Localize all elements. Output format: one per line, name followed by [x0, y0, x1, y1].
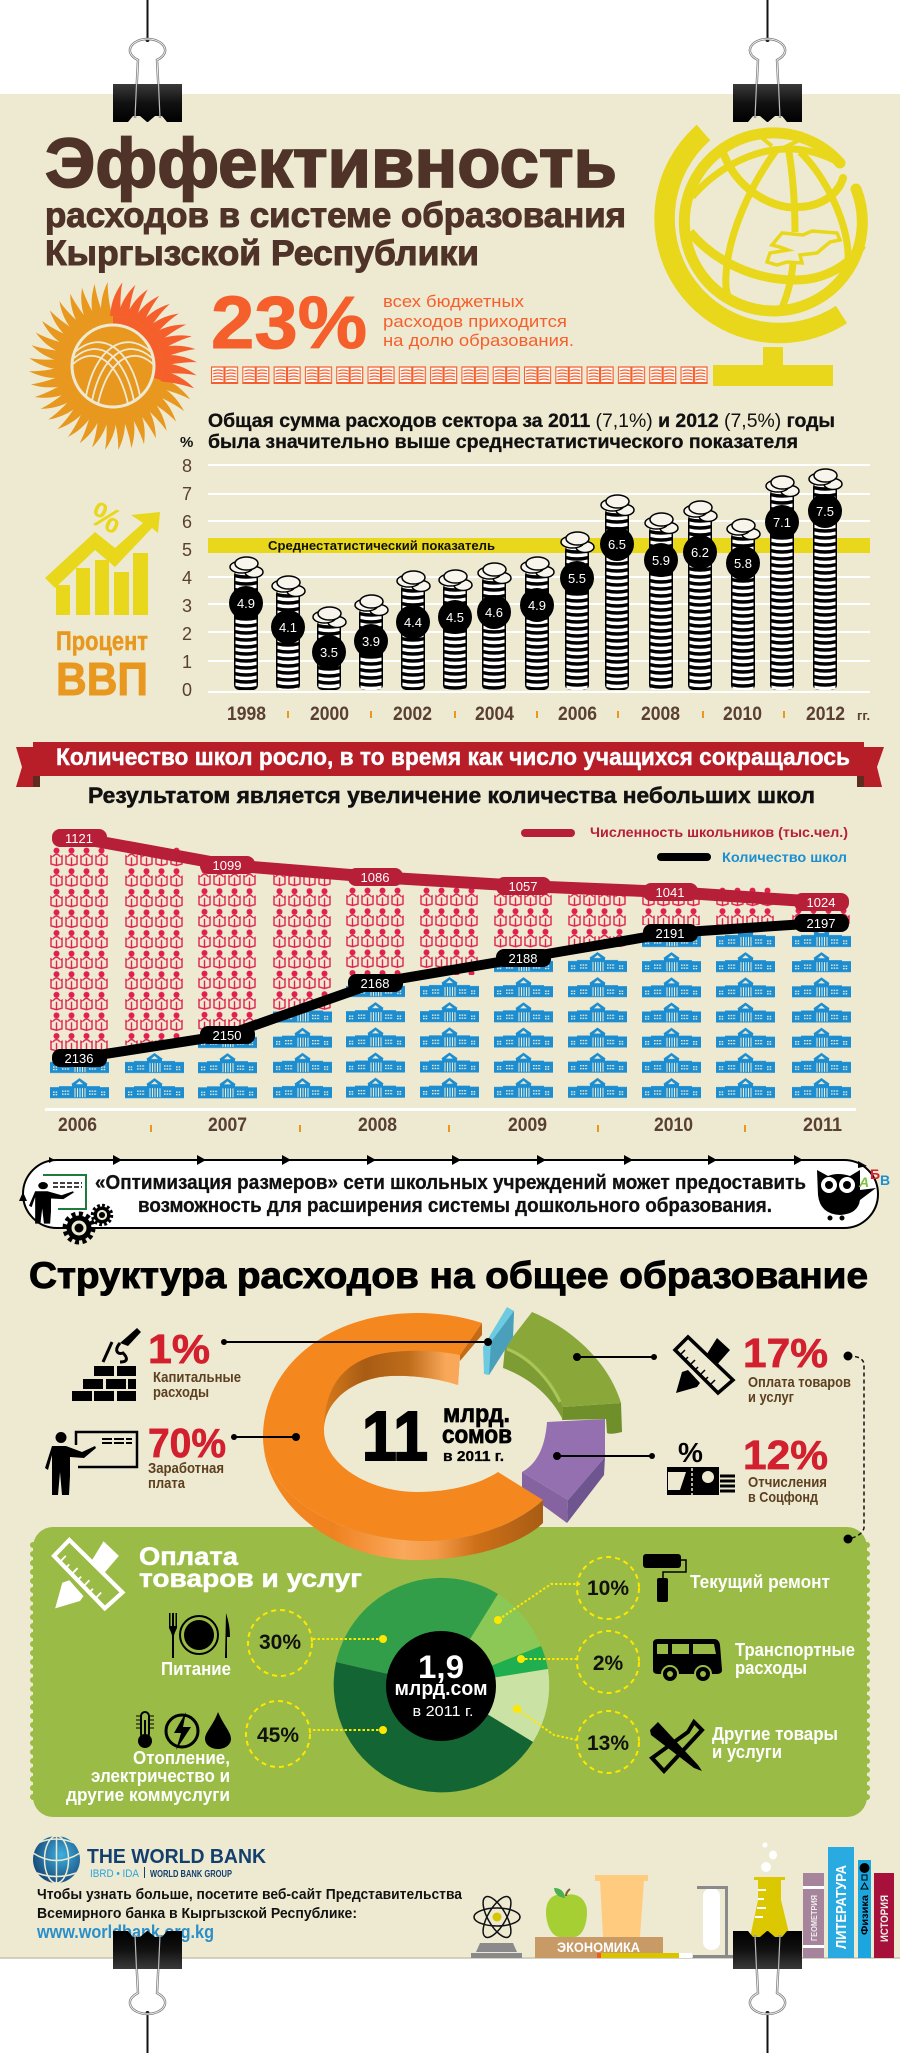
stat: 23 percent: всех бюджетных	[383, 292, 525, 311]
y axis labels: 6	[182, 512, 192, 532]
chart: GDP share bars	[182, 456, 870, 725]
icon: trowel and bricks	[72, 1328, 141, 1401]
stat: goods 17 percent: Оплата товаров	[748, 1374, 851, 1391]
center label	[362, 1397, 512, 1475]
value badges	[229, 494, 842, 669]
x axis years: 2010	[723, 704, 762, 725]
stat: 23 percent: расходов приходится	[383, 312, 567, 331]
value labels: 5.9	[652, 553, 670, 568]
time axis: 2008	[358, 1115, 397, 1136]
stat: salaries 70 percent: плата	[148, 1475, 186, 1492]
category labels: электричество и	[91, 1766, 230, 1786]
center label: млрд.	[443, 1400, 510, 1428]
value labels: 5.8	[734, 556, 752, 571]
y axis labels: 2	[182, 624, 192, 644]
average band	[208, 538, 870, 553]
category labels	[66, 1572, 855, 1805]
callout: optimization pill: возможность для расширения системы дошкольного образования.	[138, 1195, 772, 1217]
value labels: 4.9	[237, 596, 255, 611]
panel: goods and services	[33, 1527, 867, 1817]
percentages	[257, 1577, 629, 1755]
x axis years: 2004	[475, 704, 514, 725]
footer text	[36, 1887, 463, 1942]
value labels: 4.6	[485, 605, 503, 620]
icon: cup	[595, 1875, 648, 1937]
student value badges: 1121	[65, 831, 93, 846]
panel title	[139, 1543, 362, 1593]
section heading: Структура расходов на общее образование	[29, 1255, 868, 1296]
category labels: и услуги	[712, 1742, 782, 1762]
school pictograms	[50, 927, 852, 1100]
x axis years: 2008	[641, 704, 680, 725]
student value badges: 1057	[509, 879, 537, 894]
icon: plate and cutlery	[169, 1613, 230, 1658]
icon: owl with letters: А	[858, 1174, 869, 1190]
line: students	[79, 838, 821, 902]
purple slice	[522, 1419, 605, 1523]
time axis	[45, 1108, 856, 1136]
school value badges: 2168	[361, 976, 389, 991]
stat: capital 1 percent: Капитальные	[153, 1369, 241, 1386]
globe logo	[33, 1836, 80, 1883]
value labels: 4.1	[279, 620, 297, 635]
x axis years: 2002	[393, 704, 432, 725]
y axis labels	[182, 456, 192, 700]
stat: social fund 12 percent: 12%	[743, 1432, 828, 1478]
time axis: 2006	[58, 1115, 97, 1136]
stat: 23 percent: 23%	[211, 281, 367, 364]
y axis labels: 0	[182, 680, 192, 700]
stat: capital 1 percent: расходы	[153, 1384, 209, 1401]
icon: rising arrow with bars	[45, 495, 160, 615]
orange slice end edge	[460, 1323, 482, 1361]
callout: optimization pill	[19, 1155, 890, 1242]
category labels: Другие товары	[712, 1724, 838, 1744]
stat: social fund 12 percent: в Соцфонд	[748, 1489, 818, 1506]
student value badges	[52, 829, 849, 911]
y axis labels: 7	[182, 484, 192, 504]
books upright	[803, 1847, 894, 1958]
time axis: 2007	[208, 1115, 247, 1136]
chart heading: Общая сумма расходов сектора за 2011 (7,1%) и 2012 (7,5%) годы	[208, 411, 835, 432]
student value badges: 1099	[213, 858, 241, 873]
logo: The World Bank: WORLD BANK GROUP	[150, 1869, 232, 1880]
percentages: 30%	[259, 1631, 301, 1654]
binder clip: top right	[733, 0, 802, 122]
orange rim	[263, 1437, 543, 1560]
center label: сомов	[442, 1421, 512, 1449]
binder clip: bottom left	[113, 1931, 182, 2053]
category labels: Текущий ремонт	[690, 1572, 830, 1592]
label: percent of GDP: Процент	[56, 626, 148, 656]
legend: Численность школьников (тыс.чел.)	[590, 824, 848, 840]
stat: social fund 12 percent: Отчисления	[748, 1474, 827, 1491]
value labels: 4.9	[528, 598, 546, 613]
school value badges: 2188	[509, 951, 537, 966]
chart: students and schools	[45, 824, 856, 1136]
icon: paint roller	[643, 1554, 686, 1602]
stat: social fund 12 percent	[743, 1432, 828, 1506]
green slice	[503, 1312, 622, 1434]
label: percent of GDP	[56, 626, 148, 705]
orange slice	[263, 1313, 543, 1541]
value labels: 7.1	[773, 515, 791, 530]
y axis labels: 5	[182, 540, 192, 560]
category labels: Транспортные	[735, 1640, 855, 1660]
student value badges: 1024	[807, 895, 835, 910]
logo: The World Bank: THE WORLD BANK	[87, 1846, 267, 1868]
icon: pencil	[597, 1953, 692, 1958]
value labels: 4.5	[446, 610, 464, 625]
percentages: 13%	[587, 1732, 629, 1755]
icon: thermometer, bolt, drop	[136, 1712, 231, 1750]
icon: atom	[471, 1893, 522, 1958]
school value badges: 2197	[807, 916, 835, 931]
icon: teacher at blackboard	[45, 1432, 137, 1495]
x axis years: 2000	[310, 704, 349, 725]
leader lines	[221, 1338, 657, 1460]
value labels: 3.9	[362, 634, 380, 649]
icon: owl with letters	[817, 1166, 890, 1220]
logo: The World Bank	[33, 1836, 267, 1883]
icon: test tube	[693, 1886, 735, 1958]
value labels: 6.2	[691, 545, 709, 560]
icon: pencil and ruler black	[650, 1722, 702, 1771]
title	[45, 124, 626, 273]
donut chart	[263, 1307, 622, 1560]
cyan slice	[483, 1307, 514, 1375]
average band: Среднестатистический показатель	[268, 538, 495, 553]
school value badges: 2191	[656, 926, 684, 941]
percentages: 10%	[587, 1577, 629, 1600]
value labels: 6.5	[608, 537, 626, 552]
school value badges: 2150	[213, 1028, 241, 1043]
title: Кыргызской Республики	[45, 234, 479, 273]
x axis years: 2006	[558, 704, 597, 725]
stat: 23 percent	[211, 281, 574, 364]
x axis years: 1998	[227, 704, 266, 725]
student pictograms	[50, 847, 852, 1053]
coin stacks	[234, 482, 837, 690]
category labels: расходы	[735, 1658, 807, 1678]
value labels	[237, 504, 834, 660]
icon: Kyrgyz sun tunduk	[29, 282, 197, 450]
label: percent of GDP: ВВП	[56, 653, 148, 705]
icon: teacher with gears	[29, 1175, 112, 1242]
shelf illustration	[471, 1842, 894, 1958]
books upright: ЛИТЕРАТУРА	[833, 1865, 850, 1949]
stat: capital 1 percent	[148, 1326, 241, 1401]
title: Эффективность	[45, 124, 617, 202]
icon: percent and banknote: %	[678, 1437, 703, 1468]
icon: percent and banknote	[667, 1437, 735, 1495]
center label: в 2011 г.	[443, 1448, 504, 1465]
category labels: Отопление,	[133, 1748, 230, 1768]
chart heading: была значительно выше среднестатистического показателя	[208, 432, 798, 453]
category labels: Питание	[161, 1659, 231, 1679]
value labels: 4.4	[404, 615, 422, 630]
student value badges: 1041	[656, 885, 684, 900]
time axis: 2010	[654, 1115, 693, 1136]
y axis labels: 1	[182, 652, 192, 672]
stat: goods 17 percent: 17%	[743, 1330, 828, 1376]
icon: yellow globe on stand	[665, 132, 862, 386]
callouts dashed circles and leader lines	[246, 1557, 639, 1773]
orange inner wall	[324, 1351, 460, 1430]
student value badges: 1086	[361, 870, 389, 885]
leader dots	[379, 1616, 525, 1734]
icon: owl with letters: В	[880, 1172, 890, 1188]
y axis labels: 4	[182, 568, 192, 588]
pie chart: в 2011 г.	[412, 1703, 474, 1720]
time axis: 2011	[803, 1115, 842, 1136]
icon: owl with letters: Б	[870, 1166, 880, 1182]
footer text: www.worldbank.org.kg	[36, 1922, 214, 1942]
category labels: другие коммуслуги	[66, 1785, 230, 1805]
x axis years: 2012	[806, 704, 845, 725]
books upright: ГЕОМЕТРИЯ	[809, 1895, 819, 1941]
title: расходов в системе образования	[45, 196, 626, 235]
dashed connector	[844, 1352, 864, 1544]
icon: ruler and pencil white	[54, 1540, 122, 1608]
icon: bus	[653, 1639, 722, 1682]
books upright: Физика	[859, 1895, 871, 1935]
line: schools	[79, 923, 821, 1058]
panel title: товаров и услуг	[139, 1565, 362, 1593]
banner	[16, 742, 884, 787]
school value badges	[52, 914, 849, 1067]
subheading: Результатом является увеличение количества небольших школ	[88, 783, 815, 808]
coin tops	[230, 469, 842, 628]
stat: capital 1 percent: 1%	[148, 1326, 210, 1372]
footer text: Всемирного банка в Кыргызской Республике:	[37, 1906, 357, 1922]
center label: 11	[362, 1397, 428, 1475]
stat: salaries 70 percent: Заработная	[148, 1460, 224, 1477]
book: economics	[535, 1937, 663, 1958]
callout: optimization pill: «Оптимизация размеров» сети школьных учреждений может предоставить	[95, 1172, 806, 1194]
stat: salaries 70 percent: 70%	[148, 1420, 226, 1466]
pie chart: млрд.сом	[394, 1678, 488, 1700]
x axis years	[227, 704, 870, 725]
binder clip: bottom right	[733, 1931, 802, 2053]
icon: flask with bubbles	[751, 1842, 789, 1958]
stat: 23 percent: на долю образования.	[383, 331, 574, 350]
footer text: Чтобы узнать больше, посетите веб-сайт Представительства	[37, 1887, 463, 1903]
icon: rising arrow with bars: %	[84, 495, 128, 542]
icon: apple	[546, 1888, 587, 1937]
legend	[521, 824, 848, 865]
pie chart: 1,9	[418, 1649, 464, 1685]
school value badges: 2136	[65, 1051, 93, 1066]
x axis years: гг.	[857, 708, 870, 723]
value labels: 5.5	[568, 571, 586, 586]
legend: Количество школ	[722, 849, 847, 865]
icon row: books	[211, 366, 709, 384]
logo: The World Bank: IBRD • IDA	[90, 1868, 140, 1880]
percentages: 45%	[257, 1724, 299, 1747]
value labels: 7.5	[816, 504, 834, 519]
percentages: 2%	[593, 1652, 623, 1675]
time axis: 2009	[508, 1115, 547, 1136]
pie chart	[334, 1578, 549, 1792]
stat: goods 17 percent	[743, 1330, 851, 1406]
stat: goods 17 percent: и услуг	[748, 1389, 794, 1406]
panel title: Оплата	[139, 1543, 239, 1571]
book: economics: ЭКОНОМИКА	[557, 1939, 640, 1955]
banner: Количество школ росло, в то время как число учащихся сокращалось	[56, 744, 850, 771]
y axis labels: 3	[182, 596, 192, 616]
y axis labels: 8	[182, 456, 192, 476]
chart heading	[180, 411, 835, 453]
value labels: 3.5	[320, 645, 338, 660]
books upright: ИСТОРИЯ	[879, 1895, 891, 1942]
icon: ruler and pencil	[675, 1337, 733, 1393]
chart heading: %	[180, 434, 193, 451]
stat: salaries 70 percent	[148, 1420, 226, 1492]
binder clip: top left	[113, 0, 182, 122]
